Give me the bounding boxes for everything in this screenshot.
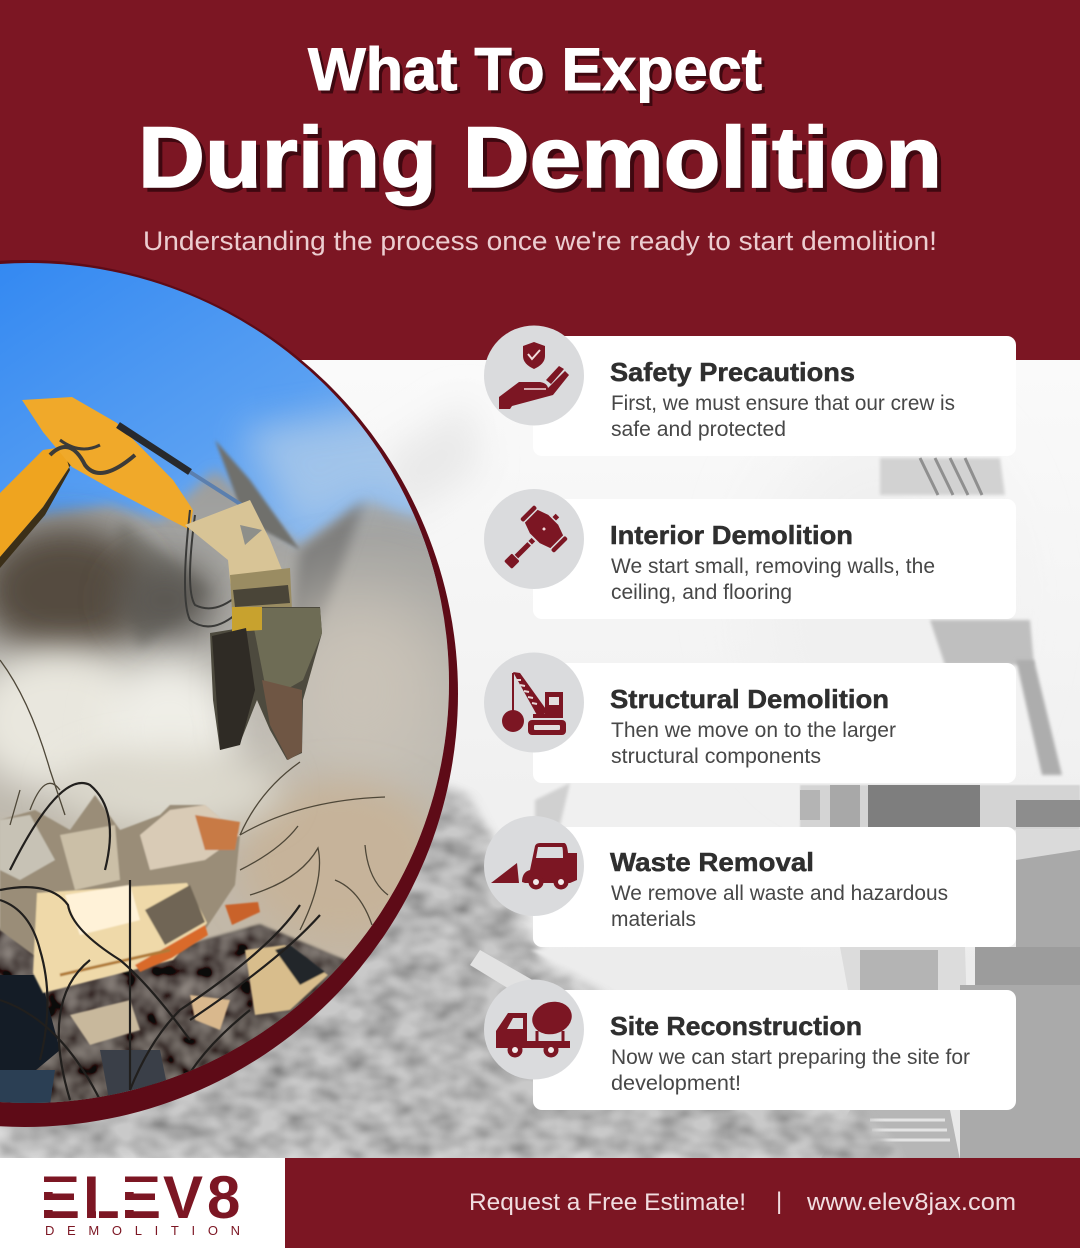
card body: development! bbox=[611, 1072, 741, 1095]
card body: structural components bbox=[611, 745, 821, 768]
card: Waste Removal bbox=[484, 816, 1016, 947]
dust cloud bbox=[0, 466, 449, 1103]
card: Site Reconstruction bbox=[484, 980, 1016, 1110]
hydraulic cylinder bbox=[118, 425, 190, 472]
excavator boom bbox=[0, 447, 72, 557]
excavator stick bbox=[22, 397, 193, 530]
footer band bbox=[285, 1158, 1080, 1248]
demolition shear bbox=[210, 607, 322, 760]
photo frame crescent bbox=[0, 260, 458, 1127]
title bbox=[138, 36, 946, 210]
rebar wires bbox=[0, 783, 320, 1100]
logo: ELEV8 Demolition: DEMOLITION bbox=[45, 1223, 240, 1238]
title: What To Expect bbox=[311, 39, 765, 106]
ruined building bbox=[115, 440, 365, 650]
lower blocks bbox=[245, 945, 328, 1015]
card body bbox=[611, 1046, 970, 1095]
card heading: Site Reconstruction bbox=[610, 1011, 862, 1041]
sky haze bbox=[233, 399, 417, 532]
dark smoke bbox=[0, 525, 150, 655]
footer call to action: | bbox=[776, 1188, 782, 1215]
card: Interior Demolition bbox=[484, 489, 1016, 619]
footer call to action: Request a Free Estimate! bbox=[469, 1189, 746, 1216]
icon: skid loader bbox=[484, 816, 584, 916]
footer call to action: www.elev8jax.com bbox=[806, 1189, 1016, 1216]
title: During Demolition bbox=[138, 110, 942, 206]
footer logo panel bbox=[0, 1158, 285, 1250]
card: Structural Demolition bbox=[484, 652, 1016, 783]
title: What To Expect bbox=[308, 36, 762, 103]
bright dust bbox=[0, 650, 150, 790]
icon: hand holding shield bbox=[484, 326, 584, 426]
title: During Demolition bbox=[142, 114, 946, 210]
card body bbox=[611, 392, 955, 441]
background: faded excavator and rubble bbox=[0, 400, 1080, 1160]
card body: We remove all waste and hazardous bbox=[611, 882, 948, 905]
logo: ELEV8 Demolition: ELEV8 bbox=[40, 1164, 240, 1231]
concrete beam bbox=[33, 883, 207, 993]
card heading: Structural Demolition bbox=[610, 684, 889, 714]
icon: cement mixer truck bbox=[484, 980, 584, 1080]
rubble pile bbox=[0, 795, 328, 1045]
photo: excavator over demolition rubble bbox=[0, 263, 449, 1103]
card body: We start small, removing walls, the bbox=[611, 555, 935, 578]
subtitle: Understanding the process once we're ready to start demolition! bbox=[143, 226, 937, 256]
card heading: Waste Removal bbox=[610, 847, 814, 877]
card body bbox=[611, 719, 896, 768]
rubble dark base bbox=[0, 922, 346, 1103]
card body: safe and protected bbox=[611, 418, 786, 441]
card: Safety Precautions bbox=[484, 326, 1016, 456]
card body bbox=[611, 555, 935, 604]
card heading: Safety Precautions bbox=[610, 357, 855, 387]
icon: sledgehammer bbox=[484, 489, 584, 589]
card body: Now we can start preparing the site for bbox=[611, 1046, 970, 1069]
icon: wrecking ball crane bbox=[484, 652, 584, 752]
header band bbox=[0, 0, 1080, 360]
hoses bbox=[185, 510, 238, 626]
card body: ceiling, and flooring bbox=[611, 581, 792, 604]
card body bbox=[611, 882, 948, 931]
card heading: Interior Demolition bbox=[610, 520, 853, 550]
card body: Then we move on to the larger bbox=[611, 719, 896, 742]
linkage bbox=[185, 500, 282, 588]
card body: First, we must ensure that our crew is bbox=[611, 392, 955, 415]
card body: materials bbox=[611, 908, 696, 931]
footer call to action bbox=[469, 1188, 1016, 1216]
